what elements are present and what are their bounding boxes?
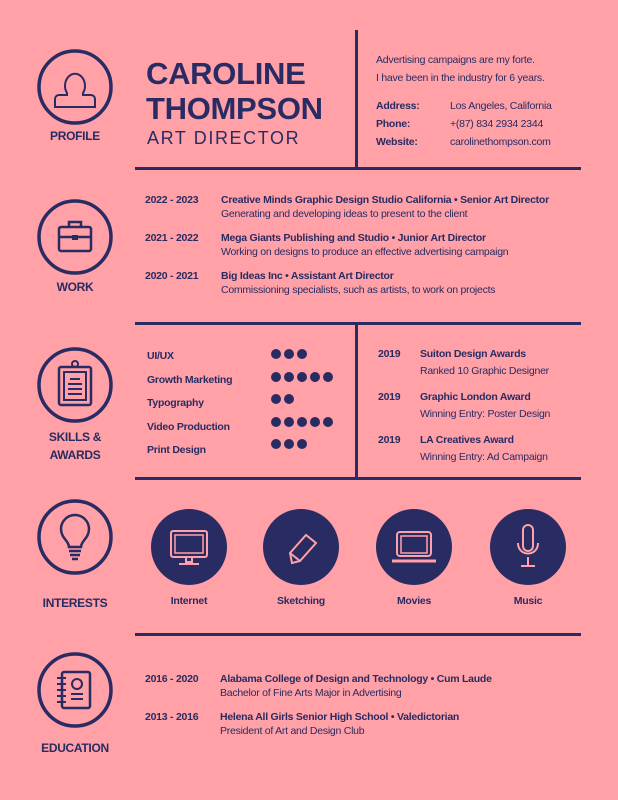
- text: Winning Entry: Ad Campaign: [420, 451, 548, 463]
- label: skills: [49, 430, 102, 462]
- text: 2022 - 2023: [145, 194, 198, 206]
- interest: internet: [151, 509, 227, 607]
- text: Helena All Girls Senior High School • Valedictorian: [220, 711, 459, 723]
- label: skills: AWARDS: [50, 448, 100, 462]
- skills list: [147, 350, 232, 456]
- text: carolinethompson.com: [450, 136, 551, 148]
- interest: movies: Movies: [397, 595, 431, 607]
- skills list: Growth Marketing: [147, 374, 232, 386]
- icon: profile: [37, 49, 113, 125]
- name title: CAROLINE: [146, 56, 306, 91]
- text: President of Art and Design Club: [220, 725, 364, 737]
- text: Big Ideas Inc • Assistant Art Director: [221, 270, 394, 282]
- intro text: Advertising campaigns are my forte.: [376, 54, 535, 66]
- skills list: Print Design: [147, 444, 206, 456]
- text: Alabama College of Design and Technology • Cum Laude: [220, 673, 492, 685]
- label: skills: SKILLS &: [49, 430, 101, 444]
- text: 2019: [378, 434, 400, 446]
- contact info: Phone:: [376, 118, 410, 130]
- name title: THOMPSON: [146, 91, 323, 126]
- skills list: Video Production: [147, 420, 230, 432]
- text: 2019: [378, 348, 400, 360]
- interest: music: [490, 509, 566, 607]
- skills list: Typography: [147, 397, 204, 409]
- name title: [146, 56, 323, 126]
- interest: music: Music: [514, 595, 542, 607]
- text: 2016 - 2020: [145, 673, 198, 685]
- contact info: Address:: [376, 100, 420, 112]
- contact info: Website:: [376, 136, 418, 148]
- text: 2013 - 2016: [145, 711, 198, 723]
- text: Mega Giants Publishing and Studio • Junior Art Director: [221, 232, 486, 244]
- label: education: EDUCATION: [41, 741, 109, 755]
- skills list: UI/UX: [147, 350, 174, 362]
- icon: work: [37, 199, 113, 275]
- text: +(87) 834 2934 2344: [450, 118, 543, 130]
- text: 2021 - 2022: [145, 232, 198, 244]
- text: 2019: [378, 391, 400, 403]
- text: Generating and developing ideas to present to the client: [221, 208, 467, 220]
- text: Bachelor of Fine Arts Major in Advertising: [220, 687, 402, 699]
- subtitle: ART DIRECTOR: [147, 128, 300, 148]
- interest: internet: Internet: [171, 595, 207, 607]
- interest: sketching: Sketching: [277, 595, 325, 607]
- text: Commissioning specialists, such as artists, to work on projects: [221, 284, 495, 296]
- text: LA Creatives Award: [420, 434, 514, 446]
- text: Ranked 10 Graphic Designer: [420, 365, 549, 377]
- label: work: WORK: [57, 280, 93, 294]
- icon: education: [37, 652, 113, 728]
- education entries: [145, 673, 492, 737]
- intro text: I have been in the industry for 6 years.: [376, 72, 545, 84]
- text: Suiton Design Awards: [420, 348, 526, 360]
- text: Graphic London Award: [420, 391, 531, 403]
- label: profile: PROFILE: [50, 129, 100, 143]
- interest: sketching: [263, 509, 339, 607]
- work entries: [145, 194, 550, 296]
- awards: [378, 348, 550, 463]
- skill dots: [271, 349, 333, 449]
- icon: skills: [37, 347, 113, 423]
- text: Working on designs to produce an effective advertising campaign: [221, 246, 508, 258]
- text: Los Angeles, California: [450, 100, 552, 112]
- label: interests: INTERESTS: [43, 596, 107, 610]
- text: Creative Minds Graphic Design Studio California • Senior Art Director: [221, 194, 549, 206]
- contact info: [376, 100, 420, 148]
- interest: movies: [376, 509, 452, 607]
- icon: interests: [37, 499, 113, 575]
- text: 2020 - 2021: [145, 270, 198, 282]
- intro text: [376, 54, 545, 84]
- text: Winning Entry: Poster Design: [420, 408, 550, 420]
